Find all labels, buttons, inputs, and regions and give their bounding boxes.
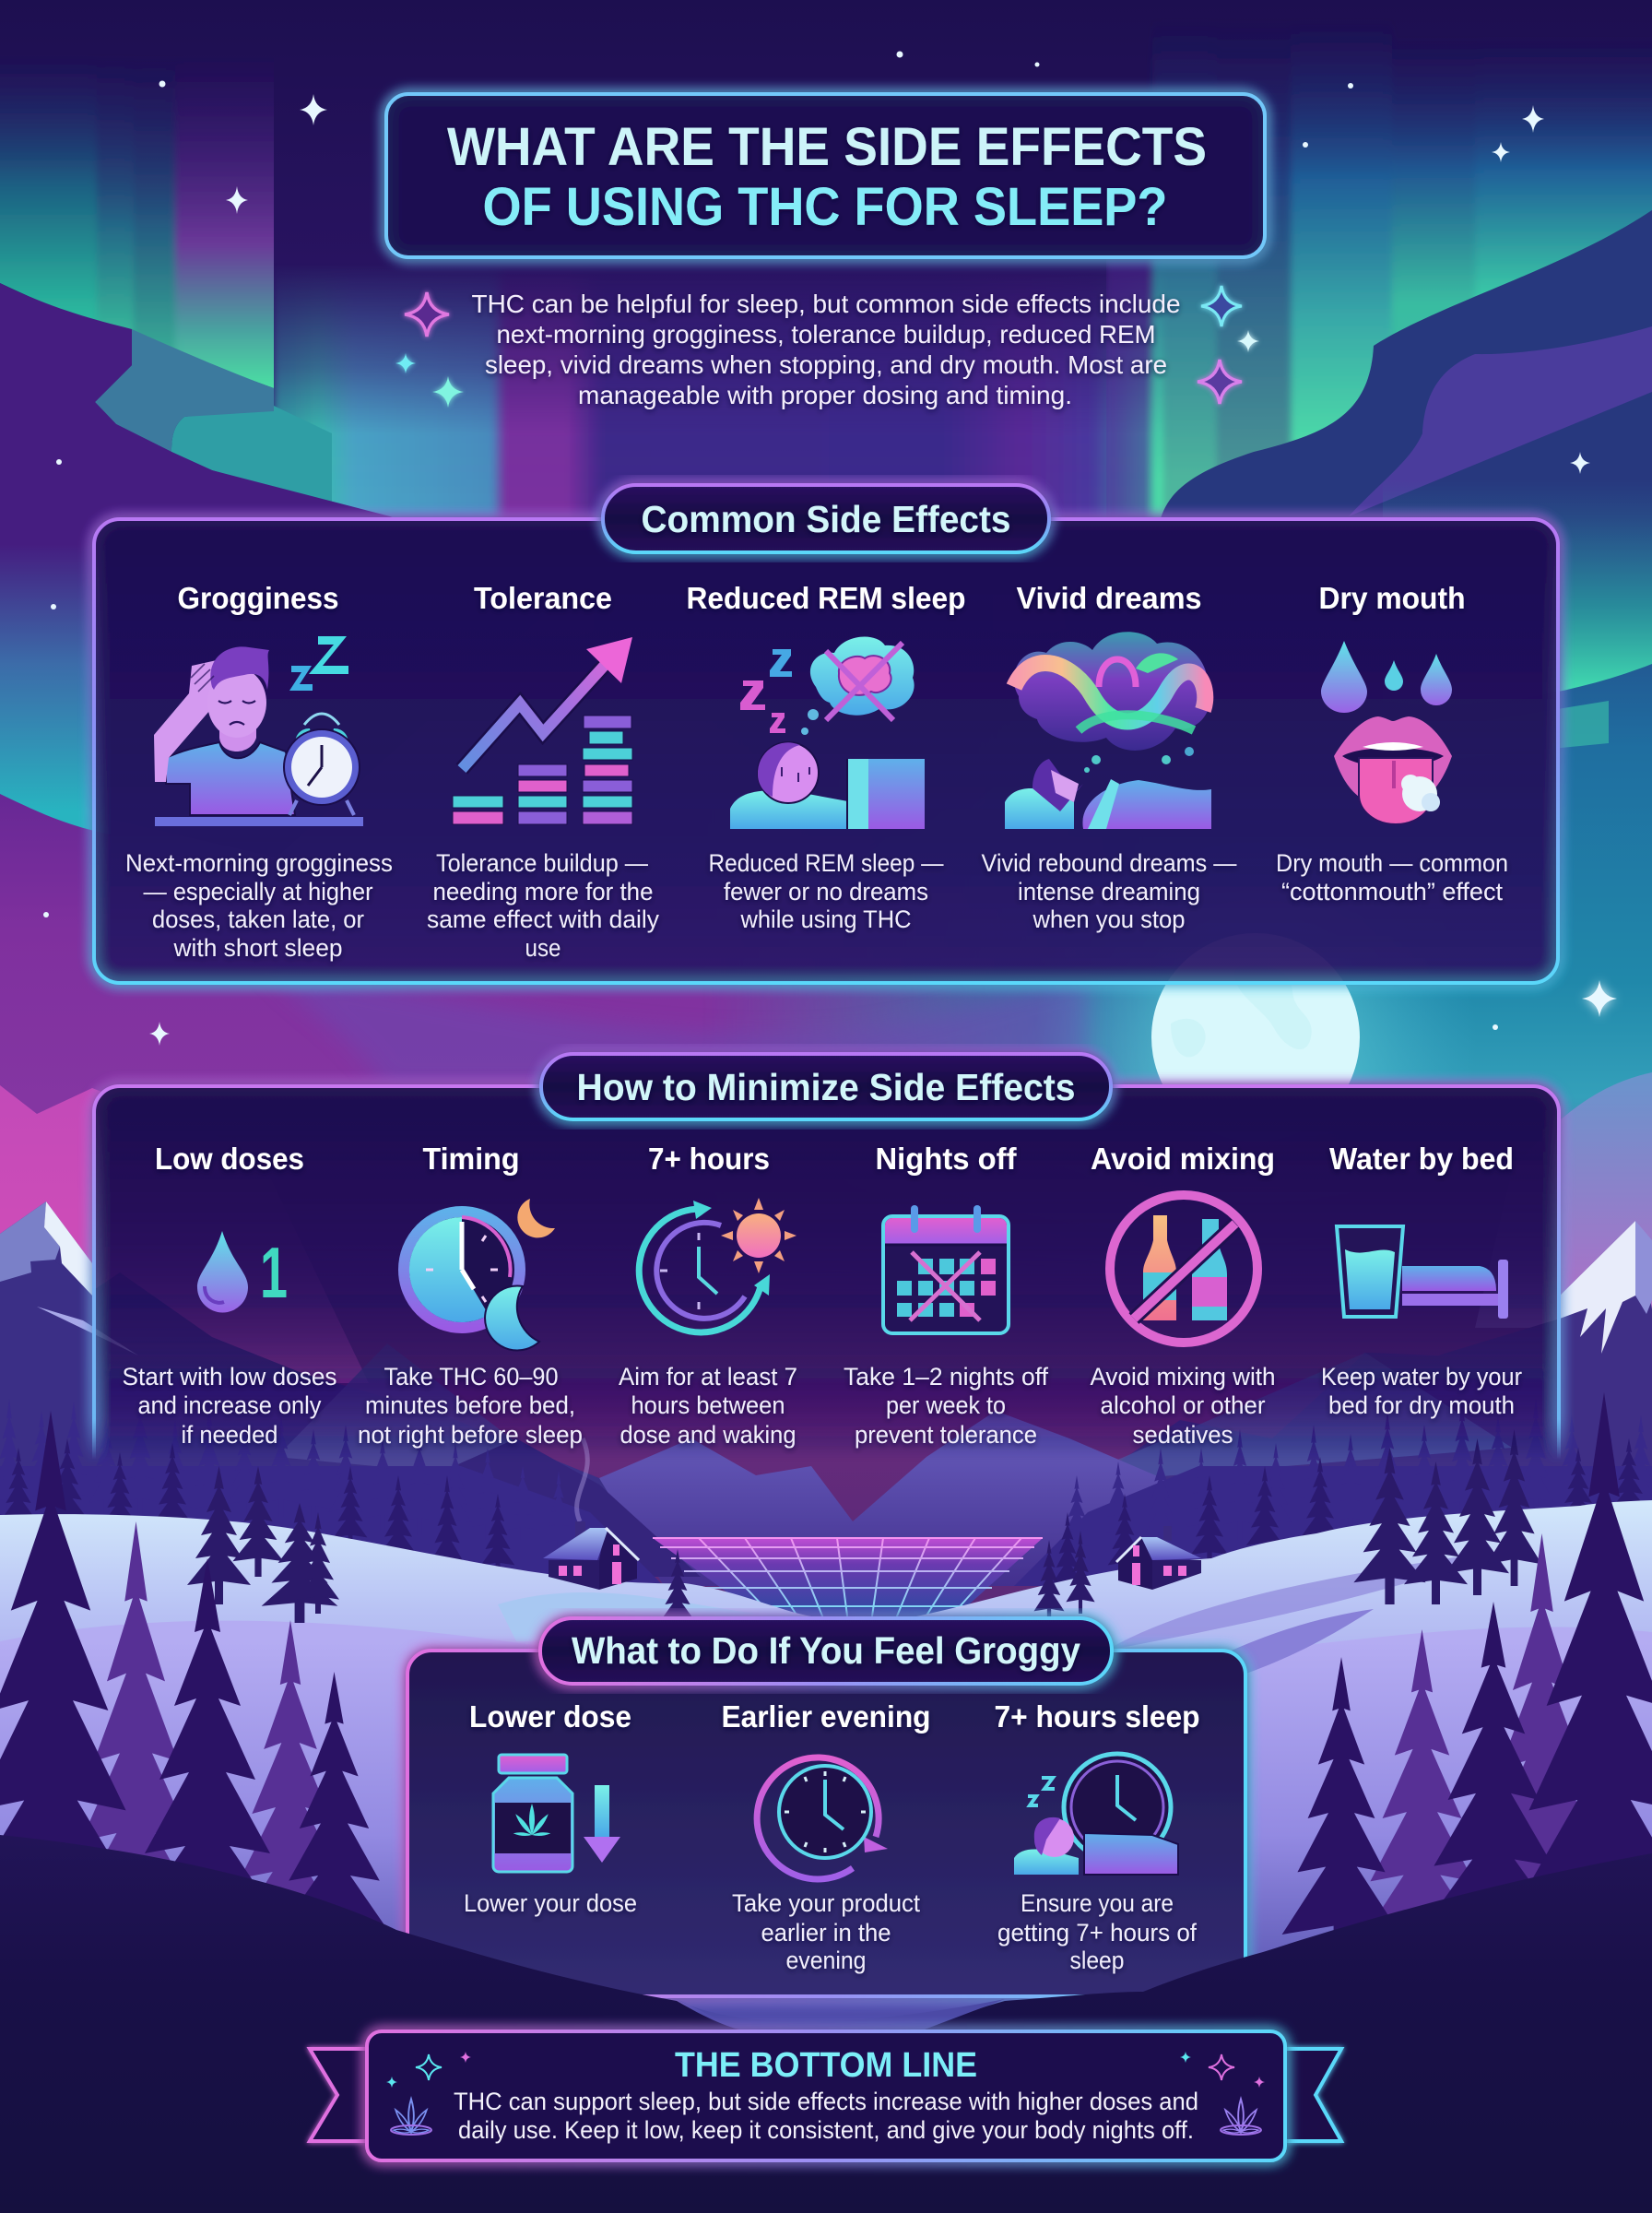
description: earlier in the [761,1919,891,1947]
column: vivid dreams: Vivid dreams [1016,581,1202,615]
column: nights off: Nights off [876,1142,1017,1176]
description: alcohol or other [1101,1391,1265,1419]
icon: groggy person with alarm clock [154,636,363,826]
column: low doses: Low doses [155,1142,304,1176]
description: Next-morning grogginess [125,849,393,877]
foreground pines [0,1392,1652,2019]
title box [386,94,1265,257]
panel: common side effects [94,485,1558,983]
description: getting 7+ hours of [997,1919,1197,1947]
description: sleep [1069,1947,1125,1974]
description: dose and waking [620,1421,796,1449]
icon: drop and number one [197,1231,288,1313]
description: needing more for the [433,878,653,905]
description [732,1889,920,1974]
column: timing: Timing [422,1142,520,1176]
banner heading: THE BOTTOM LINE [675,2046,977,2085]
neon grid floor [653,1538,1043,1623]
column: dry mouth [1276,581,1508,905]
column: 7+ hours sleep [994,1699,1200,1974]
description: if needed [181,1421,278,1449]
column: earlier evening: Earlier evening [721,1699,931,1734]
description [1321,1363,1522,1419]
description: while using THC [740,905,911,933]
description: Take THC 60–90 [384,1363,559,1391]
icon: bottle with down arrow [493,1755,620,1872]
description: Tolerance buildup — [436,849,648,877]
snow hills [0,1500,1652,2029]
icon: calendar with cross [883,1205,1009,1333]
description: “cottonmouth” effect [1281,878,1503,905]
heading pill: common side effects [603,485,1049,552]
banner text: daily use. Keep it low, keep it consistent, and give your body nights off. [458,2116,1194,2144]
description: when you stop [1032,905,1186,933]
description: and increase only [138,1391,322,1419]
icon: sleeper under clock [1014,1754,1178,1875]
cabins [543,1438,1201,1590]
intro sparkles [395,286,1259,408]
description: Keep water by your [1321,1363,1522,1391]
description [122,1363,337,1449]
icon: dry mouth with drops [1321,641,1452,824]
column: 7+ hours [619,1142,797,1449]
description: fewer or no dreams [724,878,928,905]
bottom line banner [310,2031,1341,2160]
pine groups on snow [187,1429,1541,1632]
icon: clock with sun and arrows [639,1198,796,1332]
description [708,849,944,933]
ribbon tails [310,2049,1341,2141]
description [427,849,659,962]
description: with short sleep [173,934,343,962]
intro text: sleep, vivid dreams when stopping, and dry mouth. Most are [485,350,1167,379]
description: not right before sleep [358,1421,583,1449]
description: evening [785,1947,867,1974]
heading pill: what to do [540,1618,1112,1684]
intro text [472,290,1180,409]
icon: drop and number one: 1 [260,1232,288,1313]
column: earlier evening [721,1699,931,1974]
column: reduced REM sleep [686,581,966,933]
column: dry mouth: Dry mouth [1318,581,1466,615]
description [997,1889,1197,1974]
foreground dark hills [0,1835,1652,2213]
column: water by bed: Water by bed [1329,1142,1514,1176]
intro text: THC can be helpful for sleep, but common side effects include [472,290,1180,318]
heading pill: common side effects: Common Side Effects [642,498,1010,540]
icon: glass of water and bed [1337,1226,1508,1319]
description: prevent tolerance [855,1421,1037,1449]
column: grogginess: Grogginess [177,581,339,615]
description: — especially at higher [144,878,373,905]
description: Ensure you are [1021,1889,1174,1917]
column: water by bed [1321,1142,1522,1419]
column: nights off [844,1142,1048,1449]
column: tolerance: Tolerance [474,581,612,615]
description: same effect with daily [427,905,659,933]
description [358,1363,583,1449]
description: doses, taken late, or [152,905,364,933]
description: bed for dry mouth [1328,1391,1515,1419]
description [1276,849,1508,905]
description: Vivid rebound dreams — [981,849,1237,877]
panel: what to do if you feel groggy [407,1618,1245,1996]
description: Take your product [732,1889,920,1917]
title text [447,117,1207,237]
intro text: manageable with proper dosing and timing. [578,381,1072,409]
column: 7+ hours: 7+ hours [648,1142,770,1176]
column: vivid dreams [981,581,1237,933]
description [125,849,393,962]
heading pill: how to minimize [541,1054,1111,1119]
description: Reduced REM sleep — [708,849,944,877]
description [981,849,1237,933]
description: Lower your dose [464,1889,637,1917]
column: lower dose: Lower dose [469,1699,631,1734]
title text: WHAT ARE THE SIDE EFFECTS [447,117,1207,177]
description: hours between [631,1391,785,1419]
background stars [43,52,1617,1046]
moon [1034,816,1477,1259]
description: Aim for at least 7 [619,1363,797,1391]
column: avoid mixing: Avoid mixing [1091,1142,1275,1176]
panel: how to minimize side effects [94,1054,1559,1492]
column: lower dose [464,1699,637,1917]
icon: sleeper with crossed-out brain [730,637,925,829]
icon: sleeper with colorful dream cloud [1005,632,1211,829]
icon: clock with rewind arrow [757,1757,888,1879]
title text: OF USING THC FOR SLEEP? [483,177,1167,237]
distant pine forest [0,1399,1652,1595]
banner sparkles and leaves [386,2052,1265,2135]
column: low doses [122,1142,337,1449]
column: 7+ hours sleep: 7+ hours sleep [994,1699,1200,1734]
description: per week to [886,1391,1006,1419]
description: minutes before bed, [365,1391,575,1419]
description: Avoid mixing with [1090,1363,1276,1391]
description: Dry mouth — common [1276,849,1508,877]
banner text [454,2088,1198,2144]
description: sedatives [1132,1421,1233,1449]
description [1090,1363,1276,1449]
description: use [525,934,560,962]
banner text: THC can support sleep, but side effects increase with higher doses and [454,2088,1198,2115]
column: reduced REM sleep: Reduced REM sleep [686,581,966,615]
description [619,1363,797,1449]
column: avoid mixing [1090,1142,1276,1449]
heading pill: how to minimize: How to Minimize Side Effects [577,1066,1075,1108]
column: timing [358,1142,583,1449]
icon: crossed-out bottles [1110,1195,1257,1343]
description: Start with low doses [122,1363,337,1391]
distant mountains [0,1201,1652,1586]
intro text: next-morning grogginess, tolerance buildup, reduced REM [496,320,1156,349]
icon: rising arrow and stacked bars [453,637,632,824]
icon: clock with moons [404,1199,555,1350]
column: tolerance [427,581,659,962]
description [844,1363,1048,1449]
column: grogginess [125,581,393,962]
description: intense dreaming [1018,878,1200,905]
description: Take 1–2 nights off [844,1363,1048,1391]
heading pill: what to do: What to Do If You Feel Groggy [572,1629,1080,1672]
